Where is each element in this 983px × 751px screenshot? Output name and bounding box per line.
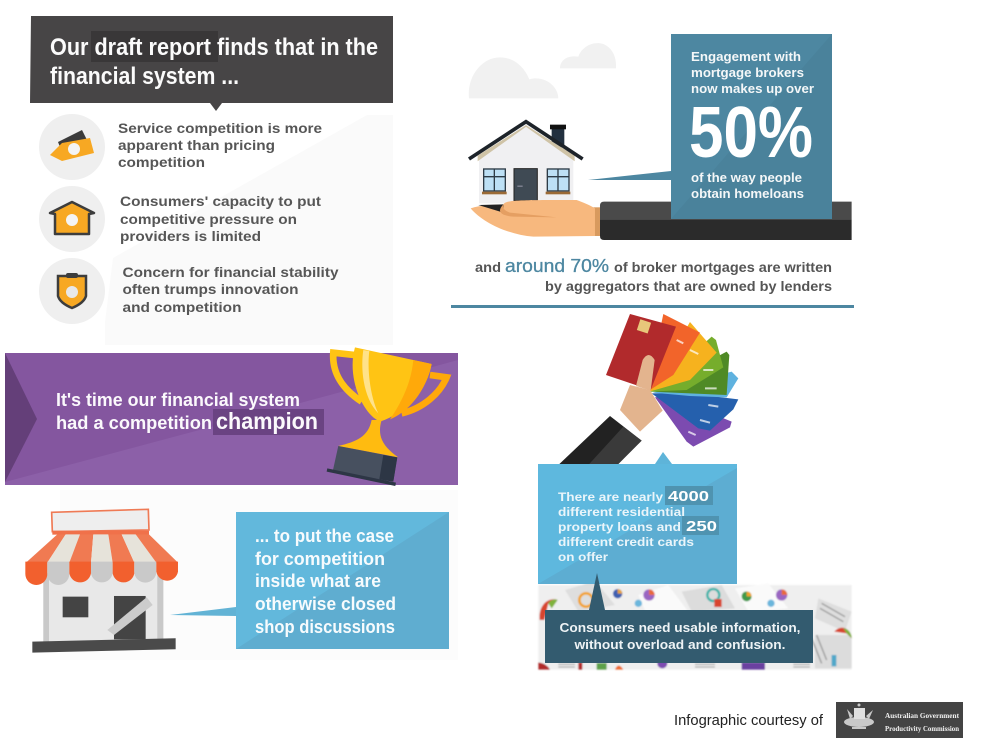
credit text: Infographic courtesy of [674, 713, 824, 729]
callout: 50 percent: of the way people [691, 170, 802, 185]
panel: competition champion banner [5, 347, 458, 486]
banner text: had a competition [56, 413, 212, 433]
finding: consumers' capacity [120, 194, 322, 244]
banner text: champion [216, 408, 318, 434]
callout: 50 percent: mortgage brokers [691, 65, 804, 80]
callout: loans and credit cards: on offer [558, 550, 608, 564]
callout: 50 percent: 50% [689, 93, 813, 173]
banner text: It's time our financial system [56, 390, 300, 410]
callout: usable information [545, 573, 813, 663]
callout: loans and credit cards: property loans and [558, 520, 681, 534]
finding: financial stability: often trumps innovation [122, 282, 298, 297]
callout: usable information: Consumers need usable information, [560, 620, 800, 635]
callout: case for competition: inside what are [255, 571, 381, 591]
callout: loans and credit cards: different residential [558, 505, 685, 519]
finding: consumers' capacity: competitive pressure on [120, 212, 297, 227]
icon: price tag [39, 114, 105, 180]
callout: usable information: without overload and confusion. [573, 637, 786, 652]
callout: loans and credit cards: There are nearly [558, 490, 663, 504]
text: around 70 percent: around 70% [505, 256, 609, 276]
callout: 50 percent: now makes up over [691, 81, 814, 96]
finding: service competition: competition [118, 155, 205, 170]
callout: loans and credit cards: 4000 [668, 488, 709, 505]
icon: shield with dollar [39, 258, 105, 324]
heading banner: Our draft report finds that in the [50, 34, 378, 61]
callout: case for competition: ... to put the case [255, 526, 394, 546]
hand holding fan of cards [558, 314, 738, 465]
callout: loans and credit cards: different credit cards [558, 535, 694, 549]
panel: too many products [538, 314, 852, 670]
heading banner: financial system ... [50, 63, 239, 90]
callout: 50 percent: Engagement with [691, 49, 801, 64]
logo: Australian Government Productivity Commission: Australian Government [885, 711, 959, 720]
scattered reports [538, 581, 852, 670]
finding: financial stability [122, 265, 339, 315]
panel: mortgage brokers [451, 34, 854, 308]
text: around 70 percent: and [475, 259, 501, 275]
text: around 70 percent [475, 256, 832, 294]
house in hand illustration [469, 43, 852, 240]
finding: financial stability: Concern for financial stability [122, 265, 339, 280]
callout: loans and credit cards [538, 452, 737, 584]
callout: case for competition: shop discussions [255, 617, 395, 637]
callout: case for competition: for competition [255, 549, 385, 569]
callout: case for competition: otherwise closed [255, 594, 396, 614]
panel: draft report findings [30, 16, 393, 324]
callout: 50 percent [588, 34, 832, 219]
icon: closed shop [25, 509, 178, 653]
callout: loans and credit cards: 250 [686, 518, 717, 535]
footer credit [674, 702, 963, 738]
finding: consumers' capacity: Consumers' capacity to put [120, 194, 322, 209]
finding: financial stability: and competition [122, 300, 242, 315]
logo: Australian Government Productivity Commission [836, 702, 963, 738]
icon: house with dollar [39, 186, 105, 252]
finding: service competition [118, 121, 323, 170]
logo: Australian Government Productivity Commission: Productivity Commission [885, 724, 960, 733]
finding: service competition: Service competition is more [118, 121, 323, 136]
text: around 70 percent: by aggregators that are owned by lenders [545, 278, 832, 294]
icon: trophy [327, 347, 447, 486]
heading banner [30, 16, 393, 111]
text: around 70 percent: of broker mortgages are written [614, 259, 832, 275]
callout: 50 percent: obtain homeloans [691, 186, 804, 201]
panel: closed shop discussions [25, 509, 449, 653]
finding: consumers' capacity: providers is limited [120, 229, 261, 244]
callout: case for competition [170, 512, 449, 649]
banner text [56, 390, 318, 434]
finding: service competition: apparent than pricing [118, 138, 275, 153]
